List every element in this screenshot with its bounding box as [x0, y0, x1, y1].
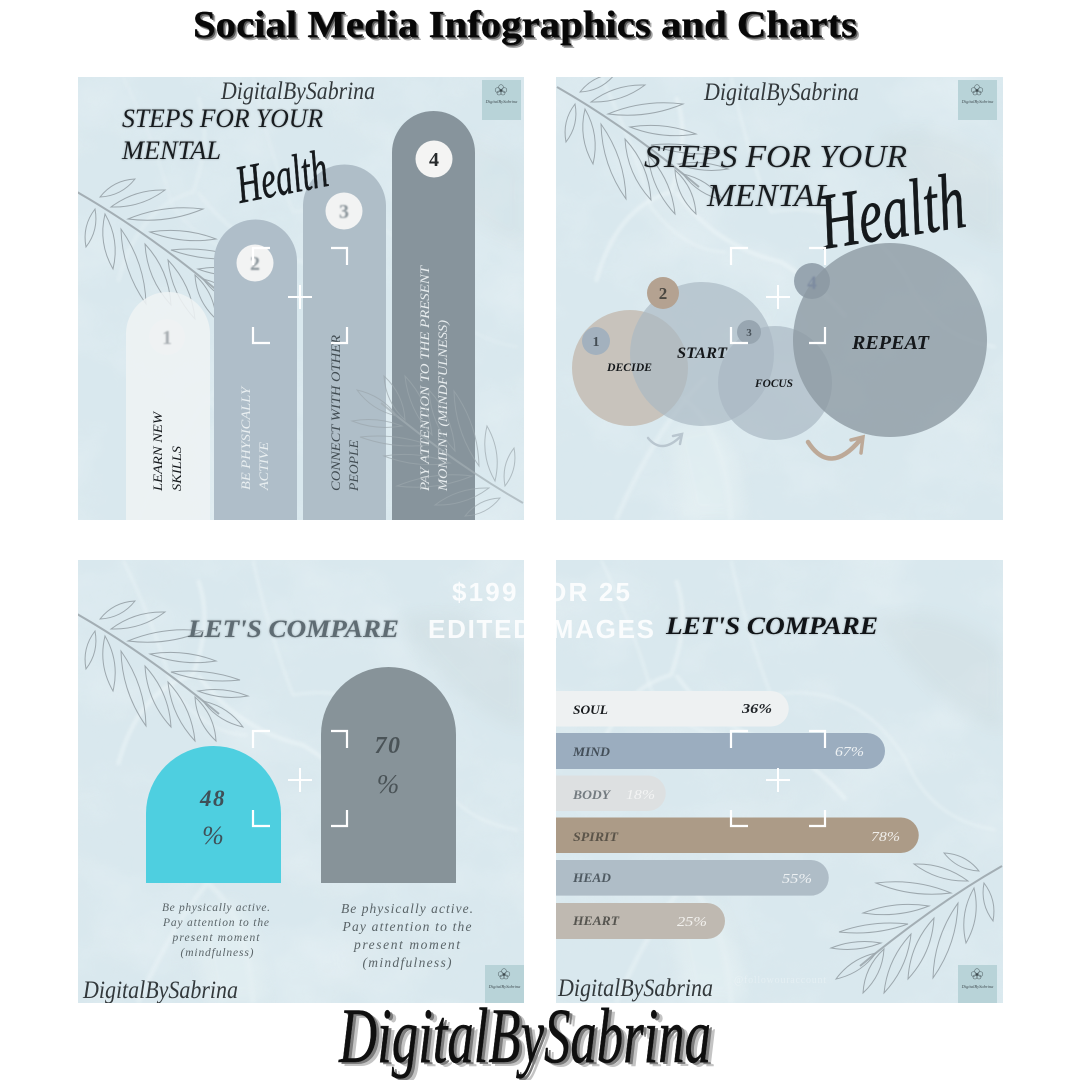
arch: 48 percent: % — [202, 821, 224, 850]
arch: step 3: PEOPLE — [346, 440, 361, 492]
leaf: upper left — [77, 601, 248, 741]
arch: step 3: 3 — [339, 201, 349, 223]
arch: step 4: MOMENT (MINDFULNESS) — [435, 320, 450, 492]
bar: body 18%: BODY — [572, 788, 611, 802]
viewfinder — [253, 731, 347, 826]
panel: overlapping circles — [556, 74, 1003, 520]
brand signature: DigitalBySabrina — [220, 78, 375, 105]
arch: step 1: LEARN NEW — [150, 411, 165, 492]
arch: 48 percent: 48 — [199, 786, 226, 811]
arch: step 4 — [392, 111, 475, 520]
price overlay: EDITED IMAGES — [428, 614, 654, 644]
heading: steps for your mental: STEPS FOR YOUR — [644, 138, 907, 174]
caption: left: Pay attention to the — [162, 917, 269, 929]
leaf: upper left — [557, 74, 728, 214]
arch: step 2 — [214, 220, 297, 520]
brand signature: DigitalBySabrina — [703, 79, 859, 106]
panel: horizontal bars — [540, 560, 1003, 1003]
arch: 70 percent: 70 — [374, 733, 402, 759]
bar: soul 36%: SOUL — [573, 703, 608, 717]
brand signature: DigitalBySabrina — [82, 977, 238, 1004]
heading: steps for your mental: MENTAL — [121, 136, 221, 165]
caption: right: Pay attention to the — [342, 919, 472, 934]
logo badge — [958, 965, 997, 1003]
bar: soul 36% — [540, 691, 789, 726]
caption: right: Be physically active. — [341, 901, 473, 916]
arch: step 2: ACTIVE — [256, 442, 271, 491]
logo badge — [485, 965, 524, 1003]
circle labels: FOCUS — [754, 378, 793, 390]
bar: soul 36%: 36% — [741, 702, 772, 717]
arch: step 2: BE PHYSICALLY — [238, 385, 253, 490]
circle: repeat: 4 — [807, 273, 817, 294]
logo badge — [482, 80, 521, 120]
bar: head 55% — [540, 860, 829, 896]
logo badge — [958, 80, 997, 120]
panel: steps arches — [77, 77, 524, 520]
script word: Health: Health — [230, 138, 333, 215]
logo badge: DigitalBySabrina — [485, 99, 518, 104]
title: Social Media Infographics and Charts — [193, 4, 857, 46]
script word: Health: Health — [812, 157, 971, 267]
logo badge: DigitalBySabrina — [961, 984, 994, 989]
caption: left — [162, 902, 270, 959]
circle labels: REPEAT — [851, 333, 930, 354]
viewfinder — [253, 248, 347, 343]
arch: step 3: CONNECT WITH OTHER — [328, 335, 343, 491]
brand logotype: DigitalBySabrina — [338, 992, 711, 1079]
bar: mind 67%: 67% — [835, 745, 864, 760]
arch: step 4: PAY ATTENTION TO THE PRESENT — [417, 265, 432, 492]
caption: right: present moment — [353, 937, 461, 952]
bar: spirit 78%: 78% — [871, 830, 900, 845]
price overlay: $199 FOR 25 — [452, 577, 630, 607]
bar: spirit 78%: SPIRIT — [573, 830, 620, 844]
bar: head 55%: 55% — [782, 872, 812, 887]
brand signature: DigitalBySabrina — [557, 975, 713, 1002]
caption: left: Be physically active. — [162, 902, 270, 914]
arch: 70 percent — [321, 667, 456, 883]
caption: left: present moment — [172, 932, 260, 944]
bar: heart 25% — [540, 903, 725, 939]
bar: body 18% — [540, 776, 666, 811]
heading: steps for your mental: STEPS FOR YOUR — [122, 104, 323, 133]
arch: step 1: 1 — [162, 327, 172, 349]
arch: step 1 — [126, 292, 210, 520]
heading: steps for your mental: MENTAL — [706, 177, 833, 213]
leaf: lower right — [831, 853, 1002, 993]
arrow: small — [648, 434, 682, 446]
arch: 70 percent: % — [377, 769, 399, 799]
arch: step 3 — [303, 164, 386, 520]
circle: start — [630, 277, 774, 426]
heading: let's compare: LET'S COMPARE — [665, 613, 878, 640]
circle: repeat — [793, 243, 987, 437]
title: Social Media Infographics and Charts — [196, 7, 860, 49]
caption: right — [341, 901, 473, 970]
circle: focus — [718, 320, 832, 440]
bar: head 55%: HEAD — [572, 871, 611, 885]
price overlay — [428, 577, 654, 644]
brand logotype: DigitalBySabrina — [341, 994, 714, 1080]
circle: focus: 3 — [746, 327, 752, 339]
arch: step 1: SKILLS — [169, 445, 184, 491]
viewfinder — [731, 731, 825, 826]
bar: body 18%: 18% — [626, 788, 655, 803]
brand logotype — [338, 992, 717, 1080]
bar: mind 67%: MIND — [572, 745, 610, 759]
bar: heart 25%: HEART — [572, 914, 620, 928]
arch: 48 percent — [146, 746, 281, 883]
heading: let's compare: LET'S COMPARE — [187, 616, 399, 643]
viewfinder — [731, 248, 825, 343]
circle: decide: 1 — [592, 335, 600, 350]
panel: arch comparison — [77, 560, 524, 1004]
circle labels: DECIDE — [606, 362, 652, 374]
circle: start: 2 — [659, 284, 667, 303]
faint handle: @followouraccount — [734, 975, 826, 986]
leaf: lower right — [352, 376, 523, 516]
caption: left: (mindfulness) — [180, 947, 254, 959]
logo badge: DigitalBySabrina — [961, 99, 994, 104]
arch: step 4: 4 — [429, 149, 439, 171]
title: Social Media Infographics and Charts — [194, 6, 858, 48]
circle labels — [606, 336, 930, 387]
bar: heart 25%: 25% — [677, 915, 707, 930]
arch: step 2: 2 — [250, 253, 260, 275]
logo badge: DigitalBySabrina — [488, 984, 521, 989]
leaf: upper left — [78, 178, 218, 320]
arrow: large — [808, 437, 863, 459]
heading: steps for your mental — [644, 144, 907, 208]
bar: spirit 78% — [540, 818, 919, 853]
circle labels: START — [677, 345, 728, 362]
bar: mind 67% — [540, 733, 885, 769]
circle: decide — [572, 310, 688, 426]
caption: right: (mindfulness) — [362, 955, 452, 970]
heading: steps for your mental — [122, 108, 324, 160]
